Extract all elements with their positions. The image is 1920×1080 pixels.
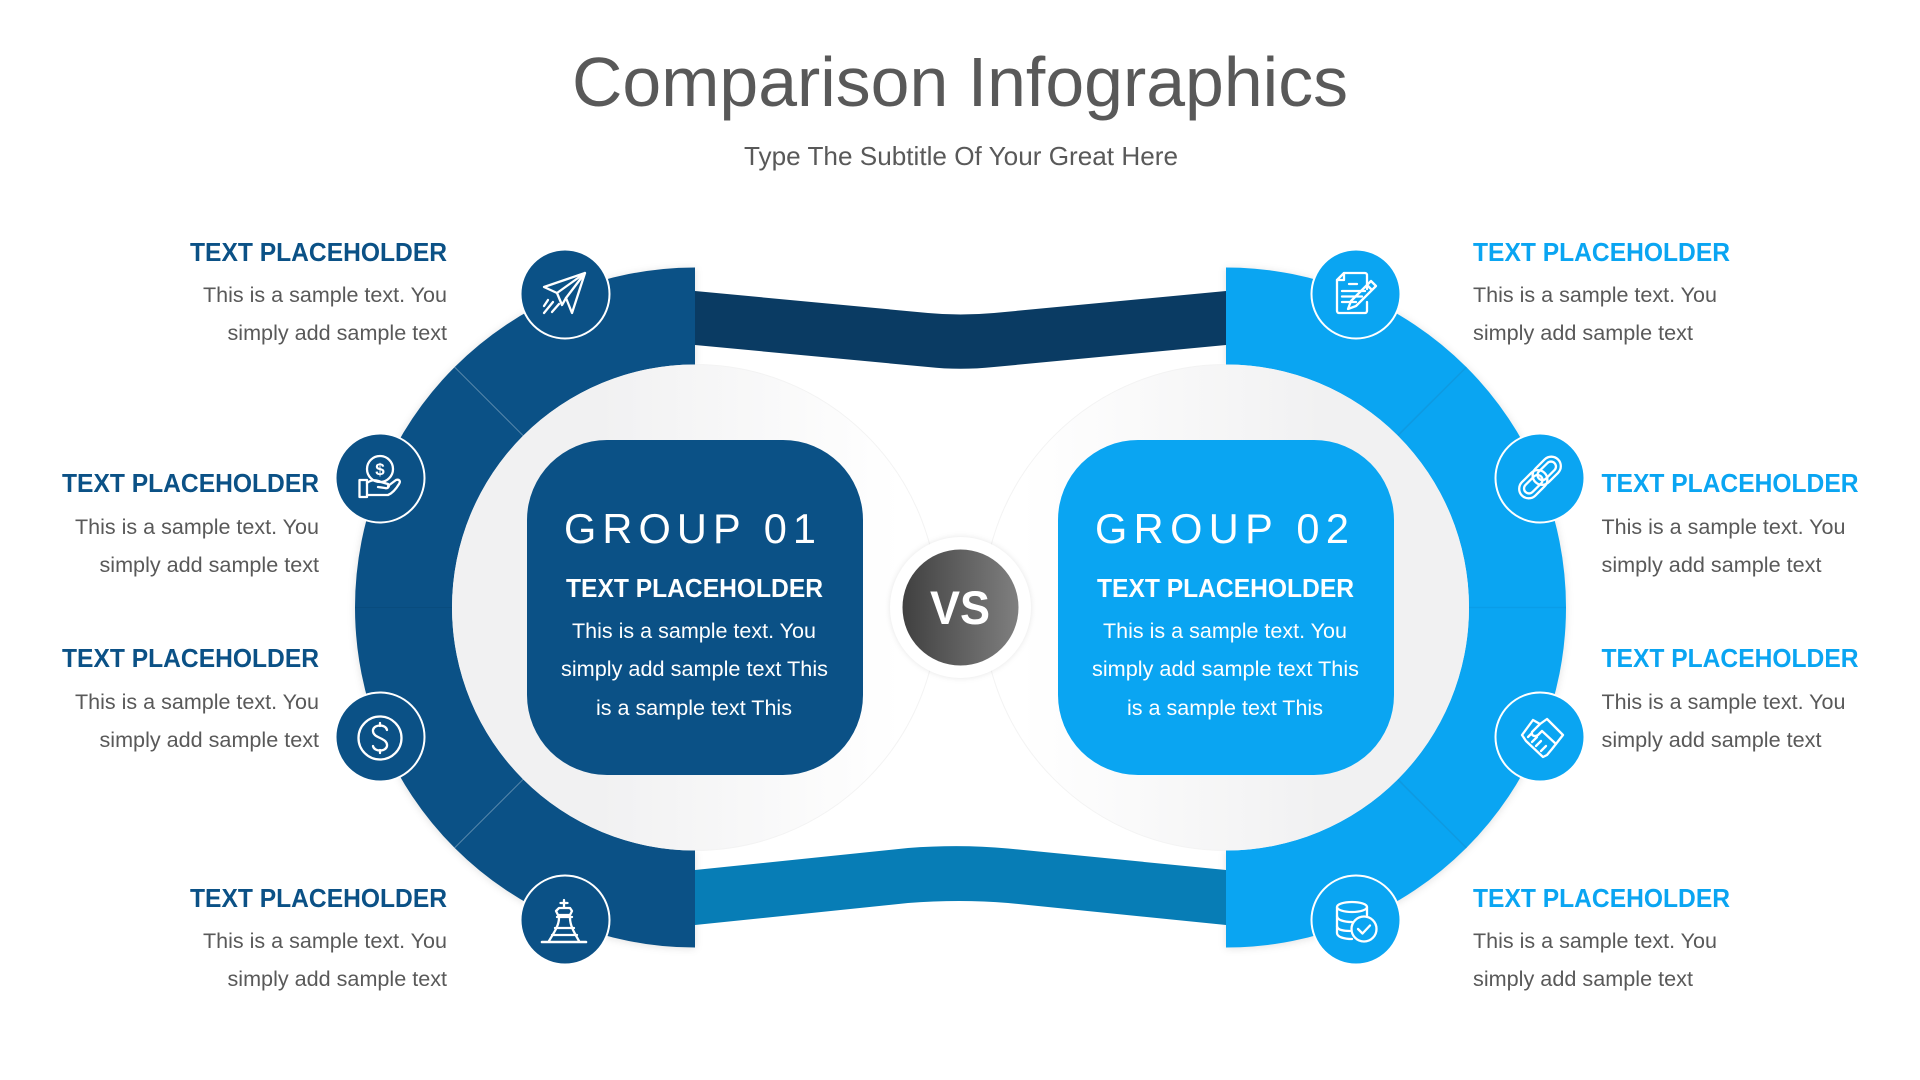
text block: left row 3 — [62, 645, 319, 752]
left arc segment: lower middle — [355, 608, 523, 848]
icon: chess king — [520, 876, 610, 964]
group 02 body: is a sample text This — [1127, 697, 1323, 720]
text block: right row 4 — [1473, 885, 1730, 991]
text block: left row 1: TEXT PLACEHOLDER — [190, 239, 447, 267]
text block: right row 2: This is a sample text. You — [1602, 516, 1846, 539]
icon: handshake — [1496, 692, 1584, 782]
right arc segment: lower middle — [1398, 608, 1566, 848]
group 01 body: simply add sample text This — [561, 658, 828, 681]
panel: group 01 — [527, 440, 863, 775]
top connector band — [695, 291, 1226, 369]
group 02 body: This is a sample text. You — [1103, 620, 1347, 643]
group 02 subheading: TEXT PLACEHOLDER — [1097, 575, 1354, 603]
text block: left row 3: TEXT PLACEHOLDER — [62, 645, 319, 673]
text block: right row 1 — [1473, 239, 1730, 345]
inner circle: group 02 background — [983, 364, 1469, 850]
group 01 heading: GROUP 01 — [564, 505, 816, 552]
left arc segment: top — [455, 268, 695, 436]
subtitle: Type The Subtitle Of Your Great Here — [744, 141, 1178, 171]
right arc segment: top — [1226, 268, 1466, 436]
icon: chain link — [1496, 434, 1584, 522]
text block: left row 1: simply add sample text — [228, 322, 447, 345]
group 01 body: This is a sample text. You — [572, 620, 816, 643]
group 01 body: is a sample text This — [596, 697, 792, 720]
text block: left row 1: This is a sample text. You — [203, 284, 447, 307]
group 02 box — [1058, 440, 1394, 775]
text block: left row 3: simply add sample text — [100, 729, 319, 752]
text block: right row 2: TEXT PLACEHOLDER — [1602, 470, 1858, 498]
icon: hand holding coin — [336, 434, 424, 522]
group 01 body — [561, 620, 828, 720]
right arc segment: upper middle — [1398, 367, 1566, 608]
icon: paper plane — [520, 250, 610, 338]
text block: left row 4 — [190, 885, 447, 991]
group 01 box — [527, 440, 863, 775]
icon: hand holding coin: $ — [375, 460, 385, 479]
text block: left row 4: This is a sample text. You — [203, 930, 447, 953]
text block: left row 2 — [62, 470, 319, 577]
text block: left row 1 — [190, 239, 447, 345]
icon: document with pencil — [1312, 250, 1400, 338]
left arc segment: upper middle — [355, 367, 523, 608]
text block: right row 1: This is a sample text. You — [1473, 284, 1717, 307]
text block: left row 2: TEXT PLACEHOLDER — [62, 470, 319, 498]
VS badge — [890, 537, 1031, 678]
title: Comparison Infographics — [572, 43, 1348, 121]
icon: database with check — [1312, 876, 1400, 964]
group 02 heading: GROUP 02 — [1095, 505, 1349, 552]
text block: right row 3: TEXT PLACEHOLDER — [1602, 645, 1858, 673]
text block: left row 2: This is a sample text. You — [75, 516, 319, 539]
right arc: group 02 ring — [1226, 268, 1566, 948]
text block: left row 3: This is a sample text. You — [75, 691, 319, 714]
group 02 body: simply add sample text This — [1092, 658, 1359, 681]
text block: right row 1: simply add sample text — [1473, 322, 1693, 345]
text block: right row 4: This is a sample text. You — [1473, 930, 1717, 953]
text block: left row 2: simply add sample text — [100, 554, 319, 577]
bottom connector band — [695, 846, 1226, 925]
text block: right row 2: simply add sample text — [1602, 554, 1822, 577]
left arc segment: bottom — [455, 779, 695, 948]
text block: right row 4: TEXT PLACEHOLDER — [1473, 885, 1730, 913]
panel: group 02 — [1058, 440, 1394, 775]
right arc segment: bottom — [1226, 779, 1466, 948]
text block: left row 4: TEXT PLACEHOLDER — [190, 885, 447, 913]
group 01 subheading: TEXT PLACEHOLDER — [566, 575, 823, 603]
text block: right row 1: TEXT PLACEHOLDER — [1473, 239, 1730, 267]
text block: right row 3: This is a sample text. You — [1602, 691, 1846, 714]
text block: left row 4: simply add sample text — [228, 968, 447, 991]
text block: right row 2 — [1602, 470, 1858, 577]
text block: right row 3: simply add sample text — [1602, 729, 1822, 752]
text block: right row 3 — [1602, 645, 1858, 752]
inner circle: group 01 background — [452, 364, 938, 850]
icon: dollar coin — [336, 692, 424, 782]
VS badge: VS — [930, 581, 990, 634]
group 02 body — [1092, 620, 1359, 720]
left arc: group 01 ring — [355, 268, 695, 948]
text block: right row 4: simply add sample text — [1473, 968, 1693, 991]
